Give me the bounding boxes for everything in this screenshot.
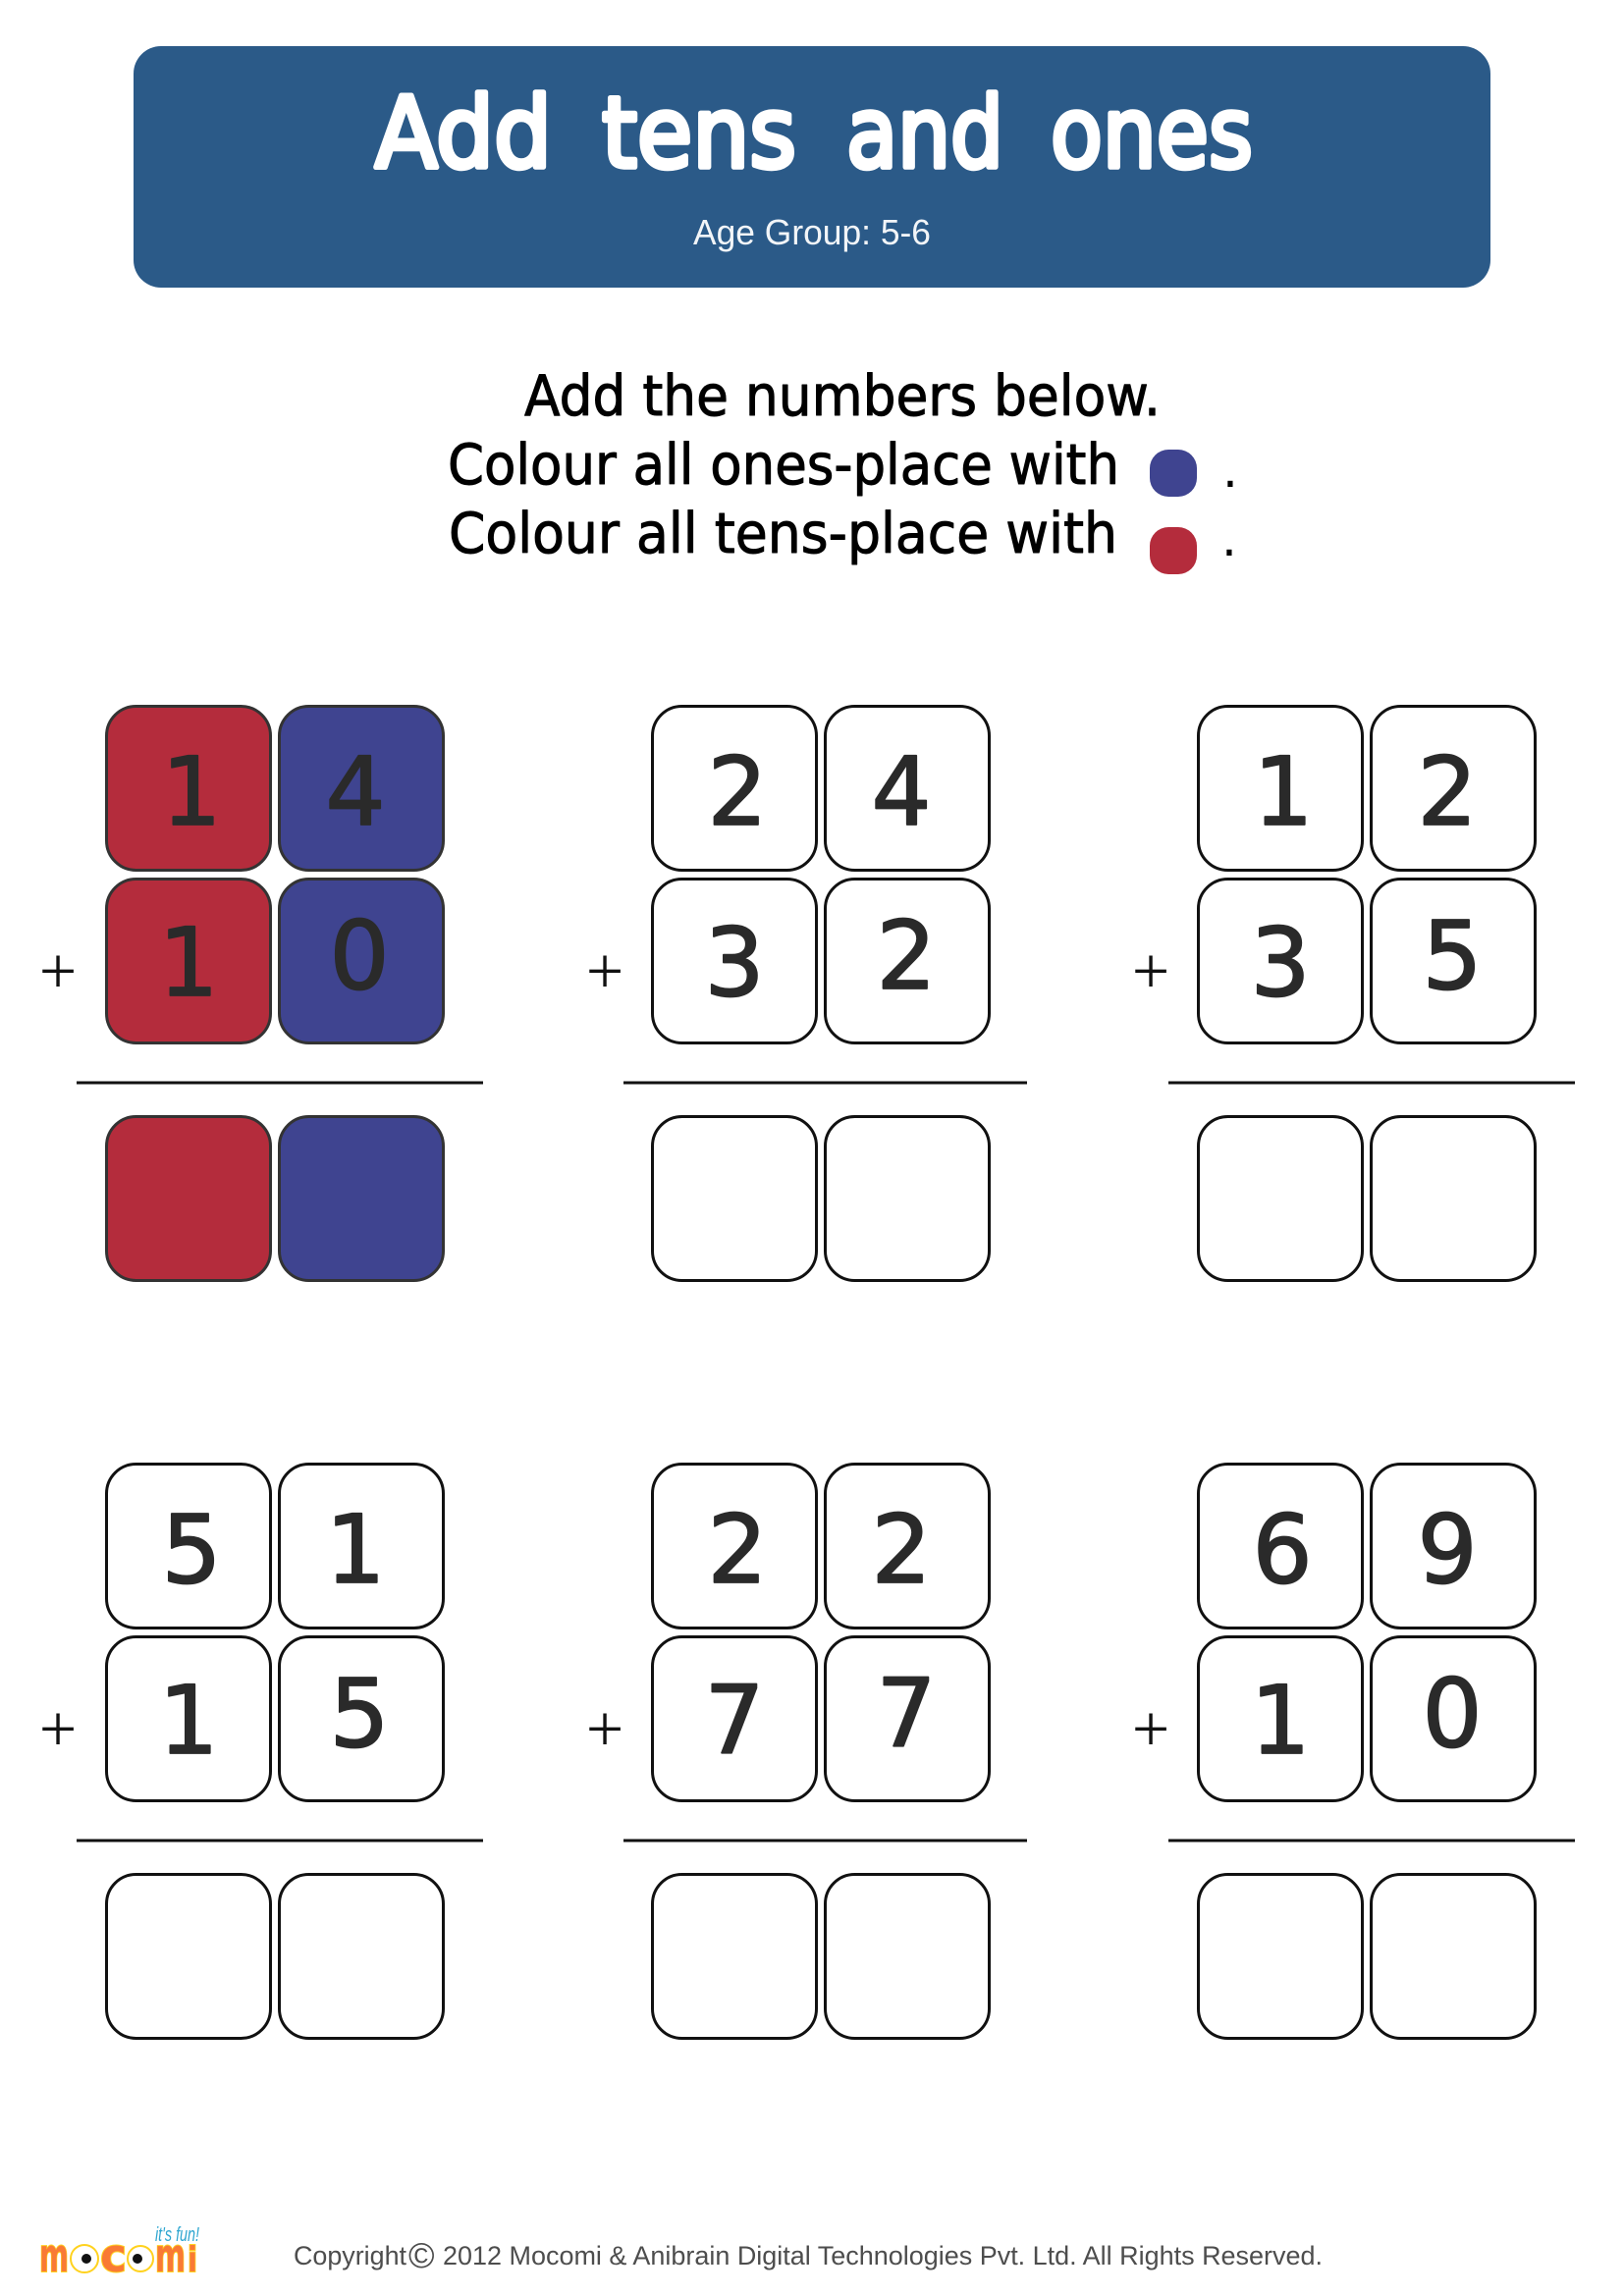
panel: 51 + 15: +	[39, 1691, 77, 1766]
panel: 69 + 10: 0	[1422, 1659, 1483, 1769]
footer copyright: 2012 Mocomi & Anibrain Digital Technologies Pvt. Ltd. All Rights Reserved.	[443, 2241, 1323, 2270]
panel: 69 + 10: +	[1132, 1691, 1169, 1766]
title	[375, 76, 1253, 190]
panel: 22 + 77: 7	[876, 1659, 937, 1769]
age group subtitle: Age Group: 5-6	[693, 212, 931, 252]
panel: 69 + 10: 1	[1250, 1666, 1311, 1776]
panel: 24 + 32	[586, 707, 1027, 1280]
logo: mocomi: it's fun!	[155, 2224, 199, 2246]
logo: mocomi: c	[100, 2229, 127, 2283]
icon: red colour key	[1150, 527, 1197, 574]
panel: 24 + 32: 2	[876, 901, 937, 1011]
panel: 24 + 32: 3	[704, 908, 765, 1018]
panel: 12 + 35: 2	[1417, 737, 1478, 847]
instructions: .	[1221, 510, 1237, 567]
logo: mocomi: m	[39, 2229, 69, 2283]
panel: 22 + 77: 2	[871, 1495, 932, 1605]
panel: 69 + 10: 9	[1417, 1495, 1478, 1605]
panel: 22 + 77: 2	[707, 1495, 768, 1605]
panel: 69 + 10: 6	[1252, 1495, 1313, 1605]
panel: 51 + 15: 1	[158, 1666, 219, 1776]
panel: worked example 14 + 10: +	[39, 934, 77, 1008]
title: and	[846, 76, 1003, 190]
title: ones	[1051, 76, 1253, 190]
header banner	[134, 46, 1490, 288]
panel: 22 + 77: +	[586, 1691, 623, 1766]
instructions: Colour all ones-place with	[448, 433, 1119, 498]
panel: worked example 14 + 10: 0	[329, 901, 390, 1011]
panel: 51 + 15: 5	[329, 1659, 390, 1769]
panel: 51 + 15: 1	[325, 1495, 386, 1605]
panel: 12 + 35: 3	[1250, 908, 1311, 1018]
panel: 12 + 35: 1	[1253, 737, 1314, 847]
panel: 24 + 32: 2	[707, 737, 768, 847]
logo: mocomi: m	[155, 2229, 186, 2283]
panel: 22 + 77	[586, 1465, 1027, 2038]
panel: 24 + 32: 4	[871, 737, 932, 847]
panel: 51 + 15	[39, 1465, 483, 2038]
panel: 24 + 32: +	[586, 934, 623, 1008]
instructions: Colour all tens-place with	[449, 502, 1117, 566]
panel: worked example 14 + 10	[39, 707, 483, 1280]
footer copyright: ©	[408, 2235, 435, 2275]
logo: mocomi	[39, 2224, 199, 2283]
panel: worked example 14 + 10: 1	[161, 737, 222, 847]
panel: 12 + 35	[1132, 707, 1575, 1280]
logo: mocomi: i	[188, 2240, 197, 2280]
icon: blue colour key	[1150, 450, 1197, 497]
panel: 69 + 10	[1132, 1465, 1575, 2038]
panel: 12 + 35: 5	[1422, 901, 1483, 1011]
panel: 51 + 15: 5	[161, 1495, 222, 1605]
instructions: Add the numbers below.	[524, 364, 1161, 429]
panel: worked example 14 + 10: 1	[158, 908, 219, 1018]
panel: 12 + 35: +	[1132, 934, 1169, 1008]
instructions: .	[1222, 442, 1238, 499]
title: Add	[375, 76, 552, 190]
title: tens	[602, 76, 796, 190]
footer copyright	[294, 2235, 1323, 2275]
footer copyright: Copyright	[294, 2241, 406, 2270]
panel: worked example 14 + 10: 4	[325, 737, 386, 847]
panel: 22 + 77: 7	[704, 1666, 765, 1776]
instructions	[448, 364, 1238, 574]
